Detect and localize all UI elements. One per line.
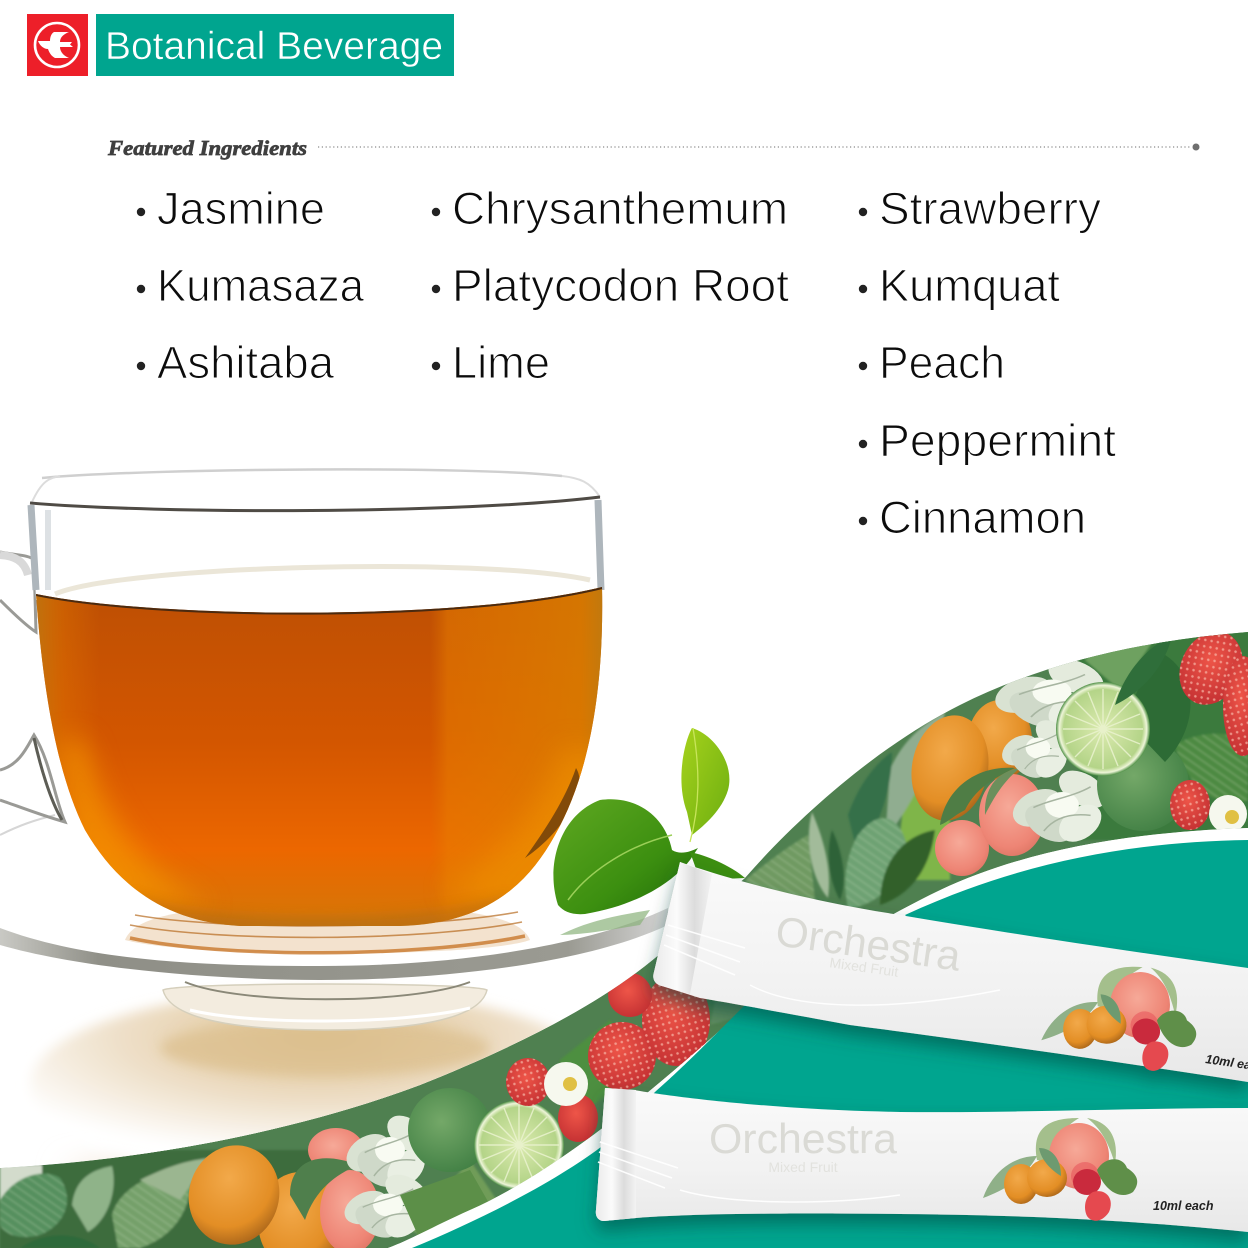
title banner — [96, 14, 454, 76]
dotted leader — [318, 144, 1200, 150]
teal swoosh with white stripe — [388, 828, 1248, 1248]
ingredients column 1: Ashitaba — [157, 337, 335, 388]
fruit illustration — [1040, 960, 1201, 1074]
logo: red square — [27, 14, 88, 76]
ingredients column 1: Kumasaza — [157, 260, 365, 311]
saucer — [0, 815, 668, 980]
lower band foliage — [0, 990, 745, 1248]
upper band foliage — [745, 630, 1248, 908]
ingredients column 3: Kumquat — [879, 260, 1060, 311]
heading: featured ingredients: Featured Ingredients — [107, 136, 307, 160]
seal strip — [596, 1088, 636, 1221]
ingredients column 2: Chrysanthemum — [452, 183, 788, 234]
product name: Mixed Fruit — [768, 1159, 838, 1175]
brand text: Orchestra — [709, 1115, 898, 1162]
embossed lines — [664, 925, 1000, 1005]
lower band fruit — [178, 973, 710, 1248]
seal strip — [653, 862, 712, 994]
ingredients column 2 — [432, 183, 789, 388]
ingredients column 3: Strawberry — [879, 183, 1101, 234]
leaf: large green — [553, 799, 745, 914]
product name: Mixed Fruit — [829, 954, 900, 980]
handle — [0, 552, 65, 822]
ingredients column 1: Jasmine — [157, 183, 325, 234]
glass body — [30, 469, 602, 600]
ingredients column 2: Platycodon Root — [452, 260, 789, 311]
upper band fruit — [903, 621, 1248, 876]
ingredients column 3 — [859, 183, 1117, 543]
ingredients column 2: Lime — [452, 337, 550, 388]
ingredients column 3: Cinnamon — [879, 492, 1086, 543]
ingredients column 3: Peppermint — [879, 415, 1117, 466]
tea — [30, 580, 610, 940]
floral band — [0, 620, 1248, 1248]
leaf: small bright — [681, 728, 729, 842]
embossed lines — [598, 1142, 900, 1202]
fruit illustration — [983, 1118, 1137, 1221]
sachet: front bottom — [596, 1088, 1248, 1232]
title banner: Botanical Beverage — [105, 25, 443, 68]
glass cup and saucer — [0, 469, 668, 1030]
ingredients column 3: Peach — [879, 337, 1005, 388]
sachet: front top — [653, 862, 1248, 1082]
ingredients column 1 — [137, 183, 365, 388]
brand text: Orchestra — [773, 907, 964, 980]
white ground behind cup — [0, 460, 700, 1168]
saucer foot — [163, 982, 487, 1030]
size label: 10ml each — [1153, 1199, 1214, 1213]
reflection under saucer — [32, 998, 554, 1162]
